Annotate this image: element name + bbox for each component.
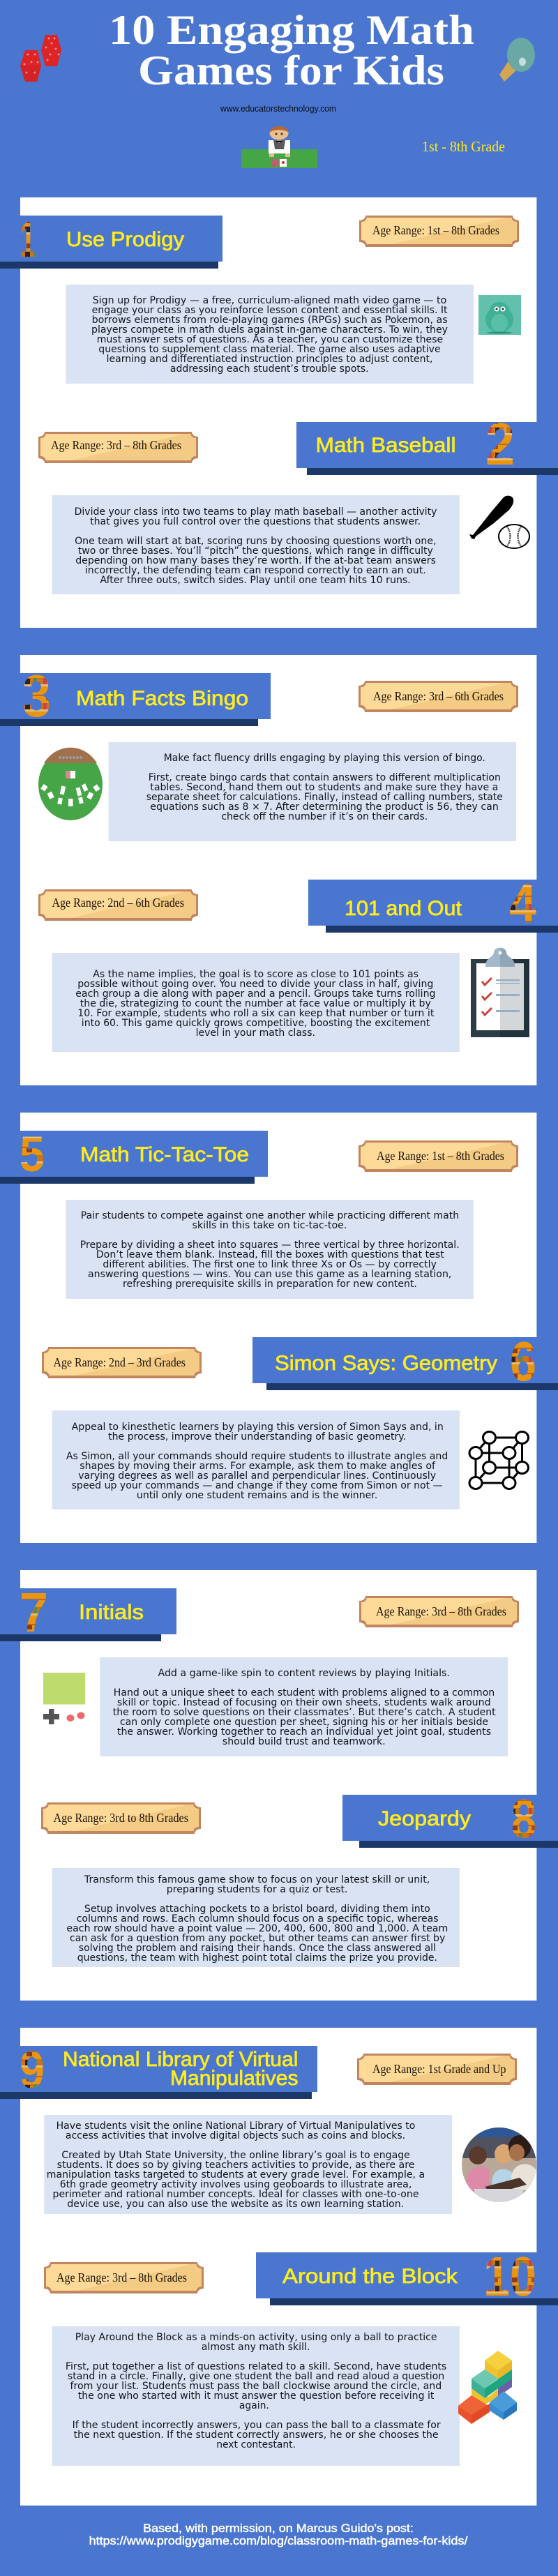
- footer credit: [89, 2522, 468, 2547]
- text block: Simon Says: Geometry: Appeal to kinesthetic learners by playing this version of Simon Says and, in: [72, 1422, 444, 1433]
- text block: National Library of Virtual Manipulatives: manipulation tasks targeted to students at every grade level. For example, a: [47, 2169, 425, 2180]
- text block: Use Prodigy: questions to supplement class material. The game also uses adaptive: [98, 344, 441, 355]
- text block: Jeopardy: columns and rows. Each column should focus on a specific topic, whereas: [77, 1913, 439, 1925]
- text block: Simon Says: Geometry: As Simon, all your commands should require students to illustrate angles and: [66, 1451, 448, 1462]
- banner: Use Prodigy: [0, 212, 223, 269]
- text block: Math Facts Bingo: tables. Second, hand them out to students and make sure they have a: [150, 782, 498, 793]
- banner: Jeopardy: [342, 1788, 558, 1849]
- text block: Use Prodigy: engage your class as you reinforce lesson content and essential skills. It: [92, 305, 448, 316]
- text block: Simon Says: Geometry: [52, 1410, 460, 1509]
- image: students at laptop in oval: [462, 2127, 536, 2202]
- banner: Around the Block: 10: [483, 2245, 536, 2307]
- banner: Math Baseball: [296, 412, 558, 478]
- age badge 3: Age Range: 3rd – 6th Grades: [373, 689, 504, 703]
- text block: Jeopardy: preparing students for a quiz or test.: [167, 1884, 348, 1895]
- text block: Simon Says: Geometry: varying degrees as well as parallel and perpendicular lines. Continuously: [78, 1470, 436, 1482]
- main title: [109, 7, 474, 93]
- text block: 101 and Out: As the name implies, the goal is to score as close to 101 points as: [93, 969, 418, 980]
- banner: 101 and Out: [308, 872, 558, 934]
- text block: Math Tic-Tac-Toe: refreshing prerequisite skills in preparation for new content.: [123, 1279, 417, 1290]
- banner: Math Facts Bingo: [0, 663, 271, 730]
- text block: Jeopardy: questions, the team with highest point total claims the prize you provide.: [77, 1952, 437, 1964]
- text block: Initials: the answer. Working together to reach an individual yet joint goal, students: [117, 1726, 491, 1738]
- text block: Initials: can only complete one question per sheet, signing his or her initials beside: [120, 1717, 488, 1728]
- age badge 4: [38, 889, 198, 921]
- text block: 101 and Out: each group a die along with paper and a pencil. Groups take turns rolling: [75, 988, 435, 1000]
- text block: Around the Block: [52, 2326, 460, 2466]
- icon: game controller: [43, 1673, 85, 1724]
- text block: Use Prodigy: [66, 285, 474, 384]
- banner: Math Tic-Tac-Toe: 5: [20, 1127, 45, 1182]
- website url: www.educatorstechnology.com: [220, 103, 336, 114]
- text block: Simon Says: Geometry: shapes by moving their arms. For example, ask them to make angles of: [80, 1461, 436, 1472]
- banner: Simon Says: Geometry: [252, 1330, 558, 1392]
- age badge 7: Age Range: 3rd – 8th Grades: [376, 1604, 506, 1618]
- text block: National Library of Virtual Manipulatives: Have students visit the online National Library of Virtual Manipulatives to: [56, 2121, 416, 2132]
- banner: National Library of Virtual Manipulatives: [0, 2040, 317, 2099]
- text block: National Library of Virtual Manipulatives: 6th grade geometry activity involves using geoboards to illustrate area,: [60, 2179, 412, 2190]
- icon: clipboard checklist: [471, 947, 529, 1037]
- banner: 101 and Out: 4: [509, 872, 536, 934]
- text block: Use Prodigy: addressing each student’s trouble spots.: [170, 363, 369, 375]
- age badge 9: [357, 2054, 517, 2085]
- panel: games 5 and 6: [0, 1113, 558, 1543]
- grade range label: 1st - 8th Grade: [422, 138, 505, 155]
- text block: National Library of Virtual Manipulatives: students. It does so by giving teachers activities to provide, as there are: [57, 2160, 414, 2171]
- age badge 5: Age Range: 1st – 8th Grades: [377, 1149, 504, 1163]
- text block: Math Facts Bingo: separate sheet for calculations. Finally, instead of calling numbers, state: [146, 792, 503, 803]
- text block: Around the Block: next contestant.: [216, 2439, 296, 2450]
- text block: 101 and Out: level in your math class.: [196, 1027, 315, 1039]
- text block: National Library of Virtual Manipulatives: perimeter and rational number concepts. Ideal for classes with one-to-one: [53, 2189, 419, 2200]
- text block: Math Tic-Tac-Toe: [66, 1200, 474, 1299]
- age badge 6: Age Range: 2nd – 3rd Grades: [53, 1355, 186, 1369]
- age badge 2: Age Range: 3rd – 8th Grades: [51, 438, 181, 452]
- text block: Use Prodigy: learning and differentiated instruction principles to adjust content,: [107, 354, 432, 365]
- banner: Math Facts Bingo: Math Facts Bingo: [76, 687, 248, 710]
- text block: Initials: [100, 1657, 508, 1756]
- banner: Use Prodigy: 1: [20, 212, 36, 268]
- text block: Use Prodigy: players compete in math duels against in-game characters. To win, they: [91, 324, 448, 336]
- text block: 101 and Out: possible without going over. You need to divide your class in half, giving: [77, 979, 433, 990]
- text block: Math Baseball: that gives you full control over the questions that students answer.: [90, 516, 421, 527]
- text block: Math Tic-Tac-Toe: different abilities. The first one to link three Xs or Os — by correctly: [103, 1259, 437, 1270]
- icon: toy building blocks: [458, 2351, 517, 2424]
- banner: National Library of Virtual Manipulatives: Manipulatives: [170, 2067, 299, 2090]
- age badge 7: [359, 1596, 519, 1627]
- text block: Initials: Hand out a unique sheet to each student with problems aligned to a common: [114, 1687, 495, 1698]
- text block: Math Baseball: After three outs, switch sides. Play until one team hits 10 runs.: [100, 575, 411, 586]
- text block: Initials: the room to solve questions on their classmates’. But there’s catch. A student: [113, 1707, 496, 1718]
- icon: cube network: [469, 1431, 529, 1489]
- text block: Math Facts Bingo: First, create bingo cards that contain answers to different multiplication: [149, 772, 501, 783]
- banner: Math Tic-Tac-Toe: [0, 1127, 268, 1184]
- icon: card table: [38, 748, 103, 820]
- banner: Initials: [0, 1581, 176, 1643]
- age badge 5: [359, 1140, 518, 1172]
- text block: Math Facts Bingo: equations such as 8 × 7. After determining the product is 56, they can: [150, 801, 499, 813]
- age badge 8: [41, 1802, 201, 1834]
- panel: games 1 and 2: [0, 197, 558, 628]
- text block: Use Prodigy: must answer sets of questions. As a teacher, you can customize these: [97, 334, 443, 345]
- text block: Jeopardy: solving the problem and raising their hands. Once the class answered all: [79, 1943, 436, 1954]
- age badge 10: [44, 2262, 204, 2293]
- text block: National Library of Virtual Manipulatives: access activities that involve digital objects such as coins and blocks.: [66, 2130, 405, 2141]
- text block: Math Facts Bingo: [109, 742, 516, 841]
- footer credit: Based, with permission, on Marcus Guido's post:: [143, 2522, 414, 2535]
- age badge 9: Age Range: 1st Grade and Up: [372, 2062, 506, 2076]
- text block: Around the Block: stand in a circle. Finally, give one student the ball and read aloud a question: [68, 2371, 444, 2382]
- text block: Jeopardy: [52, 1868, 460, 1967]
- panel: games 3 and 4: [0, 655, 558, 1085]
- text block: Jeopardy: each row should have a point value — 200, 400, 600, 800 and 1,000. A team: [66, 1923, 448, 1934]
- banner: Around the Block: Around the Block: [282, 2265, 458, 2288]
- banner: National Library of Virtual Manipulatives: National Library of Virtual: [63, 2048, 299, 2071]
- panel: games 7 and 8: [0, 1570, 558, 2001]
- text block: Math Tic-Tac-Toe: answering questions — wins. You can use this game as a learning station,: [88, 1269, 451, 1280]
- text block: Math Facts Bingo: check off the number if it’s on their cards.: [221, 811, 428, 822]
- icon: red dice: [20, 35, 61, 82]
- text block: Math Baseball: incorrectly, the defending team can respond correctly to earn an out.: [85, 565, 426, 576]
- age badge 1: Age Range: 1st – 8th Grades: [372, 223, 499, 237]
- text block: Initials: should build trust and teamwork.: [223, 1736, 386, 1747]
- text block: Use Prodigy: Sign up for Prodigy — a free, curriculum-aligned math video game — to: [93, 295, 446, 306]
- text block: Math Baseball: [52, 495, 460, 594]
- text block: Simon Says: Geometry: speed up your commands — and change if they come from Simon or not —: [72, 1480, 443, 1491]
- age badge 10: Age Range: 3rd – 8th Grades: [56, 2270, 187, 2284]
- text block: 101 and Out: [52, 953, 460, 1052]
- banner: Math Facts Bingo: 3: [22, 663, 51, 730]
- banner: Around the Block: [256, 2245, 558, 2307]
- text block: 101 and Out: 10. For example, students who roll a six can keep that number or turn it: [77, 1008, 435, 1019]
- banner: Use Prodigy: Use Prodigy: [66, 228, 184, 251]
- banner: National Library of Virtual Manipulatives: 9: [20, 2040, 45, 2099]
- text block: 101 and Out: the die, strategizing to count the number at face value or multiply it by: [80, 998, 431, 1009]
- text block: Around the Block: the one who started with it must answer the question before receiving it: [78, 2390, 435, 2402]
- text block: Jeopardy: can ask for a question from any pocket, but other teams can answer first by: [70, 1933, 446, 1944]
- illustration: card dealer: [241, 126, 317, 168]
- text block: Math Baseball: One team will start at bat, scoring runs by choosing questions worth one,: [75, 536, 437, 547]
- age badge 2: [38, 432, 198, 463]
- text block: Around the Block: almost any math skill.: [202, 2342, 310, 2353]
- text block: Around the Block: First, put together a list of questions related to a skill. Second, have students: [66, 2361, 446, 2372]
- panel: games 9 and 10: [0, 2028, 558, 2506]
- text block: Jeopardy: Setup involves attaching pockets to a bristol board, dividing them into: [84, 1904, 430, 1915]
- text block: Math Tic-Tac-Toe: Prepare by dividing a sheet into squares — three vertical by three horizontal.: [80, 1240, 460, 1251]
- text block: Simon Says: Geometry: until only one student remains and is the winner.: [137, 1490, 377, 1501]
- text block: Initials: skill or topic. Instead of focusing on their own sheets, students walk around: [117, 1697, 491, 1708]
- text block: Math Tic-Tac-Toe: Pair students to compete against one another while practicing different math: [81, 1210, 459, 1221]
- text block: Initials: Add a game-like spin to content reviews by playing Initials.: [158, 1668, 450, 1679]
- text block: 101 and Out: into 60. This game quickly grows competitive, boosting the excitement: [82, 1018, 430, 1029]
- text block: Simon Says: Geometry: the process, improve their understanding of basic geometry.: [108, 1431, 406, 1443]
- banner: Initials: 7: [20, 1581, 48, 1643]
- text block: National Library of Virtual Manipulatives: [44, 2115, 452, 2214]
- footer credit: https://www.prodigygame.com/blog/classroom-math-games-for-kids/: [89, 2534, 468, 2547]
- icon: baseball bat and ball: [469, 496, 529, 548]
- text block: Jeopardy: Transform this famous game show to focus on your latest skill or unit,: [84, 1874, 430, 1885]
- text block: Around the Block: If the student incorrectly answers, you can pass the ball to a classmate for: [73, 2420, 441, 2431]
- banner: Math Tic-Tac-Toe: Math Tic-Tac-Toe: [80, 1143, 249, 1166]
- text block: Around the Block: the next question. If the student correctly answers, he or she chooses the: [74, 2430, 439, 2441]
- banner: Simon Says: Geometry: 6: [510, 1330, 536, 1392]
- icon: ping-pong paddle: [499, 38, 535, 82]
- text block: Math Baseball: two or three bases. You’ll “pitch” the questions, which range in difficulty: [78, 545, 433, 557]
- banner: Math Baseball: Math Baseball: [315, 434, 456, 457]
- banner: 101 and Out: 101 and Out: [345, 897, 462, 920]
- text block: Math Tic-Tac-Toe: skills in this take on tic-tac-toe.: [193, 1220, 347, 1231]
- text block: Math Facts Bingo: Make fact fluency drills engaging by playing this version of bingo.: [164, 753, 485, 764]
- text block: Math Tic-Tac-Toe: Don’t leave them blank. Instead, fill the boxes with questions that test: [96, 1249, 444, 1260]
- text block: Around the Block: from your list. Students must pass the ball clockwise around the circle, and: [70, 2381, 442, 2392]
- main title: 10 Engaging Math: [109, 7, 474, 53]
- age badge 8: Age Range: 3rd to 8th Grades: [53, 1811, 188, 1825]
- age badge 3: [359, 681, 518, 712]
- banner: Jeopardy: 8: [511, 1788, 536, 1849]
- age badge 1: [359, 216, 519, 247]
- banner: Math Baseball: 2: [485, 412, 515, 478]
- icon: green monster: [478, 295, 521, 335]
- text block: National Library of Virtual Manipulatives: Created by Utah State University, the online library’s goal is to engage: [61, 2150, 410, 2161]
- text block: Around the Block: Play Around the Block as a minds-on activity, using only a ball to practice: [75, 2332, 437, 2343]
- banner: Simon Says: Geometry: Simon Says: Geometry: [275, 1352, 497, 1375]
- text block: Math Baseball: Divide your class into two teams to play math baseball — another activity: [75, 506, 437, 518]
- age badge 6: [42, 1347, 202, 1378]
- age badge 4: Age Range: 2nd – 6th Grades: [52, 896, 184, 910]
- main title: Games for Kids: [138, 47, 444, 93]
- text block: National Library of Virtual Manipulatives: device use, you can also use the website as its own learning station.: [67, 2199, 404, 2210]
- banner: Initials: Initials: [79, 1601, 144, 1624]
- banner: Jeopardy: Jeopardy: [378, 1807, 471, 1830]
- text block: Use Prodigy: borrows elements from role-playing games (RPGs) such as Pokemon, as: [92, 315, 448, 326]
- text block: Around the Block: again.: [239, 2400, 269, 2411]
- text block: Math Baseball: depending on how many bases they’re worth. If the at-bat team answers: [75, 555, 436, 566]
